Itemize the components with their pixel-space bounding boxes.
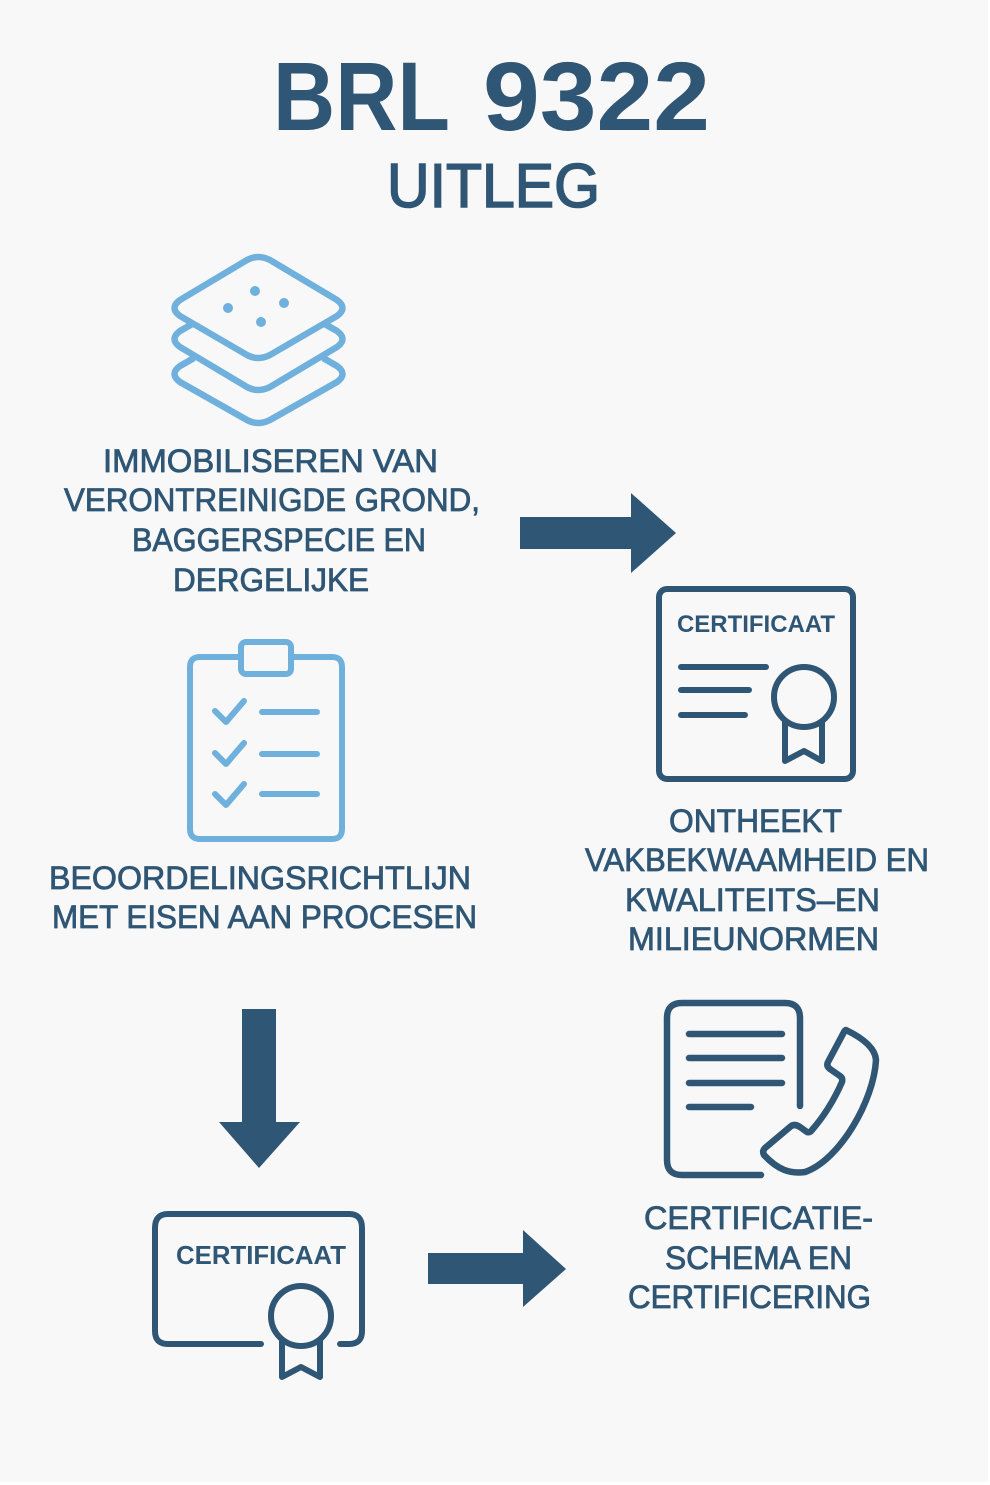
text: ontheekt: KWALITEITS–EN bbox=[625, 882, 880, 918]
icon: soil layers bbox=[174, 257, 342, 423]
subtitle: UITLEG bbox=[387, 152, 600, 221]
text: ontheekt: VAKBEKWAAMHEID EN bbox=[585, 842, 929, 878]
arrow: right top bbox=[520, 493, 676, 573]
text: beoordelingsrichtlijn: BEOORDELINGSRICHTLIJN bbox=[49, 860, 471, 896]
arrow: right bottom bbox=[428, 1230, 566, 1307]
text: ontheekt: MILIEUNORMEN bbox=[628, 921, 879, 957]
arrow: down bbox=[219, 1009, 300, 1168]
text: ontheekt: ONTHEEKT bbox=[669, 803, 842, 839]
icon: certificate with ribbon bbox=[155, 1214, 362, 1377]
icon: certificate with lines bbox=[659, 589, 853, 779]
icon: document and phone bbox=[667, 1003, 876, 1175]
text: beoordelingsrichtlijn bbox=[49, 860, 477, 935]
text: ontheekt bbox=[585, 803, 929, 957]
text: immobiliseren: BAGGERSPECIE EN bbox=[132, 522, 426, 558]
icon: certificate with lines: CERTIFICAAT bbox=[677, 611, 835, 638]
text: beoordelingsrichtlijn: MET EISEN AAN PROCESEN bbox=[52, 899, 477, 935]
text: certificatie: SCHEMA EN bbox=[665, 1240, 852, 1276]
text: immobiliseren: IMMOBILISEREN VAN bbox=[103, 443, 438, 479]
text: certificatie bbox=[628, 1200, 873, 1315]
text: immobiliseren: DERGELIJKE bbox=[173, 562, 369, 598]
title: BRL bbox=[273, 42, 450, 151]
text: immobiliseren bbox=[64, 443, 480, 598]
icon: certificate with ribbon: CERTIFICAAT bbox=[176, 1240, 346, 1270]
icon: clipboard checklist bbox=[190, 642, 342, 839]
text: certificatie: CERTIFICERING bbox=[628, 1279, 871, 1315]
text: immobiliseren: VERONTREINIGDE GROND, bbox=[64, 482, 480, 518]
title: 9322 bbox=[483, 42, 710, 151]
text: certificatie: CERTIFICATIE- bbox=[644, 1200, 873, 1236]
